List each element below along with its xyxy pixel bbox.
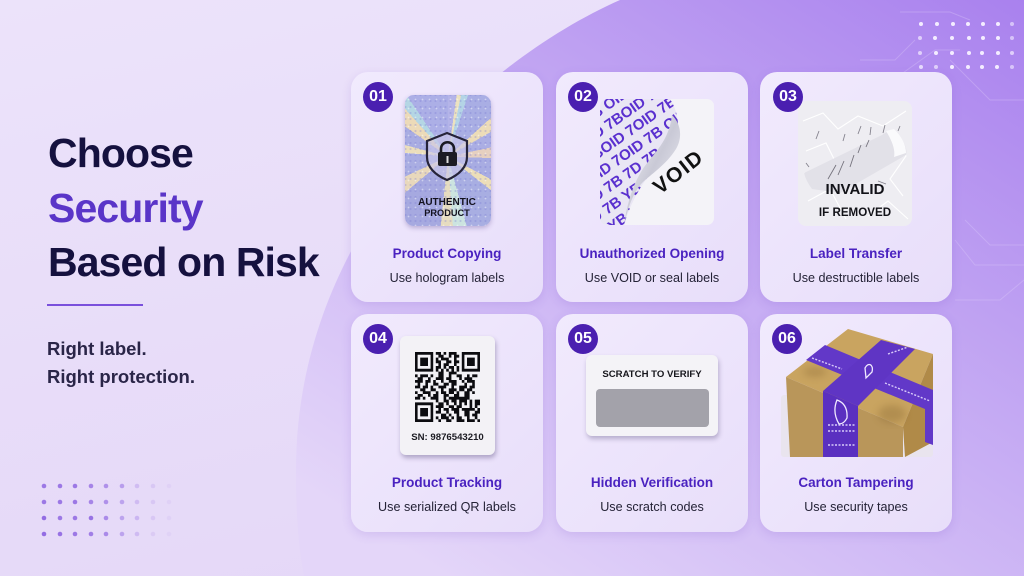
- panel: product tracking: [351, 314, 543, 532]
- title: [48, 130, 320, 285]
- panel: product copying: [351, 72, 543, 302]
- dot pattern: top right: [918, 22, 1014, 69]
- heading: Carton Tampering: [798, 475, 914, 490]
- panel: carton tampering: [760, 314, 952, 532]
- badge 04: 04: [369, 330, 387, 347]
- icon: scratch label: [586, 355, 718, 436]
- badge 06: 06: [778, 330, 796, 347]
- icon: hologram label: [405, 95, 491, 226]
- description: Use security tapes: [804, 500, 908, 514]
- tagline: Right label.: [47, 338, 147, 359]
- tagline: [47, 338, 195, 387]
- icon: shield and lock: [427, 133, 467, 180]
- label text: AUTHENTIC: [418, 197, 476, 208]
- badge 05: [568, 324, 598, 354]
- tape print: [812, 347, 930, 445]
- scratch panel: [596, 389, 709, 427]
- description: Use hologram labels: [390, 271, 504, 285]
- heading: Hidden Verification: [591, 475, 713, 490]
- badge 06: [772, 324, 802, 354]
- serial number: SN: 9876543210: [411, 432, 484, 443]
- label text: INVALID: [826, 181, 885, 198]
- badge 03: 03: [779, 88, 797, 105]
- dot pattern: bottom left: [42, 484, 171, 536]
- badge 01: 01: [369, 88, 387, 105]
- description: Use destructible labels: [793, 271, 919, 285]
- revealed VOID text: VOID: [649, 146, 707, 199]
- icon: taped carton: [781, 329, 933, 457]
- tagline: Right protection.: [47, 366, 195, 387]
- panel: label transfer: [760, 72, 952, 302]
- icon: VOID label: [600, 99, 714, 225]
- badge 01: [363, 82, 393, 112]
- panel: hidden verification: [556, 314, 748, 532]
- badge 04: [363, 324, 393, 354]
- title: Security: [48, 184, 203, 230]
- badge 05: 05: [574, 330, 592, 347]
- icon: destructible label: [798, 101, 912, 226]
- title divider: [47, 304, 143, 306]
- panel: unauthorized opening: [556, 72, 748, 302]
- peeled layer: [600, 99, 678, 225]
- description: Use scratch codes: [600, 500, 704, 514]
- heading: Product Copying: [393, 246, 501, 261]
- badge 02: [568, 82, 598, 112]
- description: Use serialized QR labels: [378, 500, 516, 514]
- security tape: [806, 340, 933, 457]
- icon: QR label: [400, 336, 495, 455]
- title: Choose: [48, 130, 193, 176]
- peeled strip: [804, 131, 906, 193]
- heading: Label Transfer: [810, 246, 902, 261]
- peel fold: [624, 115, 680, 225]
- box faces: [786, 329, 933, 427]
- heading: Product Tracking: [392, 475, 502, 490]
- label text: SCRATCH TO VERIFY: [602, 369, 702, 380]
- QR code: [415, 352, 480, 422]
- title: Based on Risk: [48, 239, 319, 285]
- description: Use VOID or seal labels: [585, 271, 719, 285]
- icon: hologram label: PRODUCT: [424, 208, 470, 218]
- badge 03: [773, 82, 803, 112]
- badge 02: 02: [574, 88, 592, 105]
- icon: destructible label: IF REMOVED: [819, 206, 891, 219]
- heading: Unauthorized Opening: [580, 246, 724, 261]
